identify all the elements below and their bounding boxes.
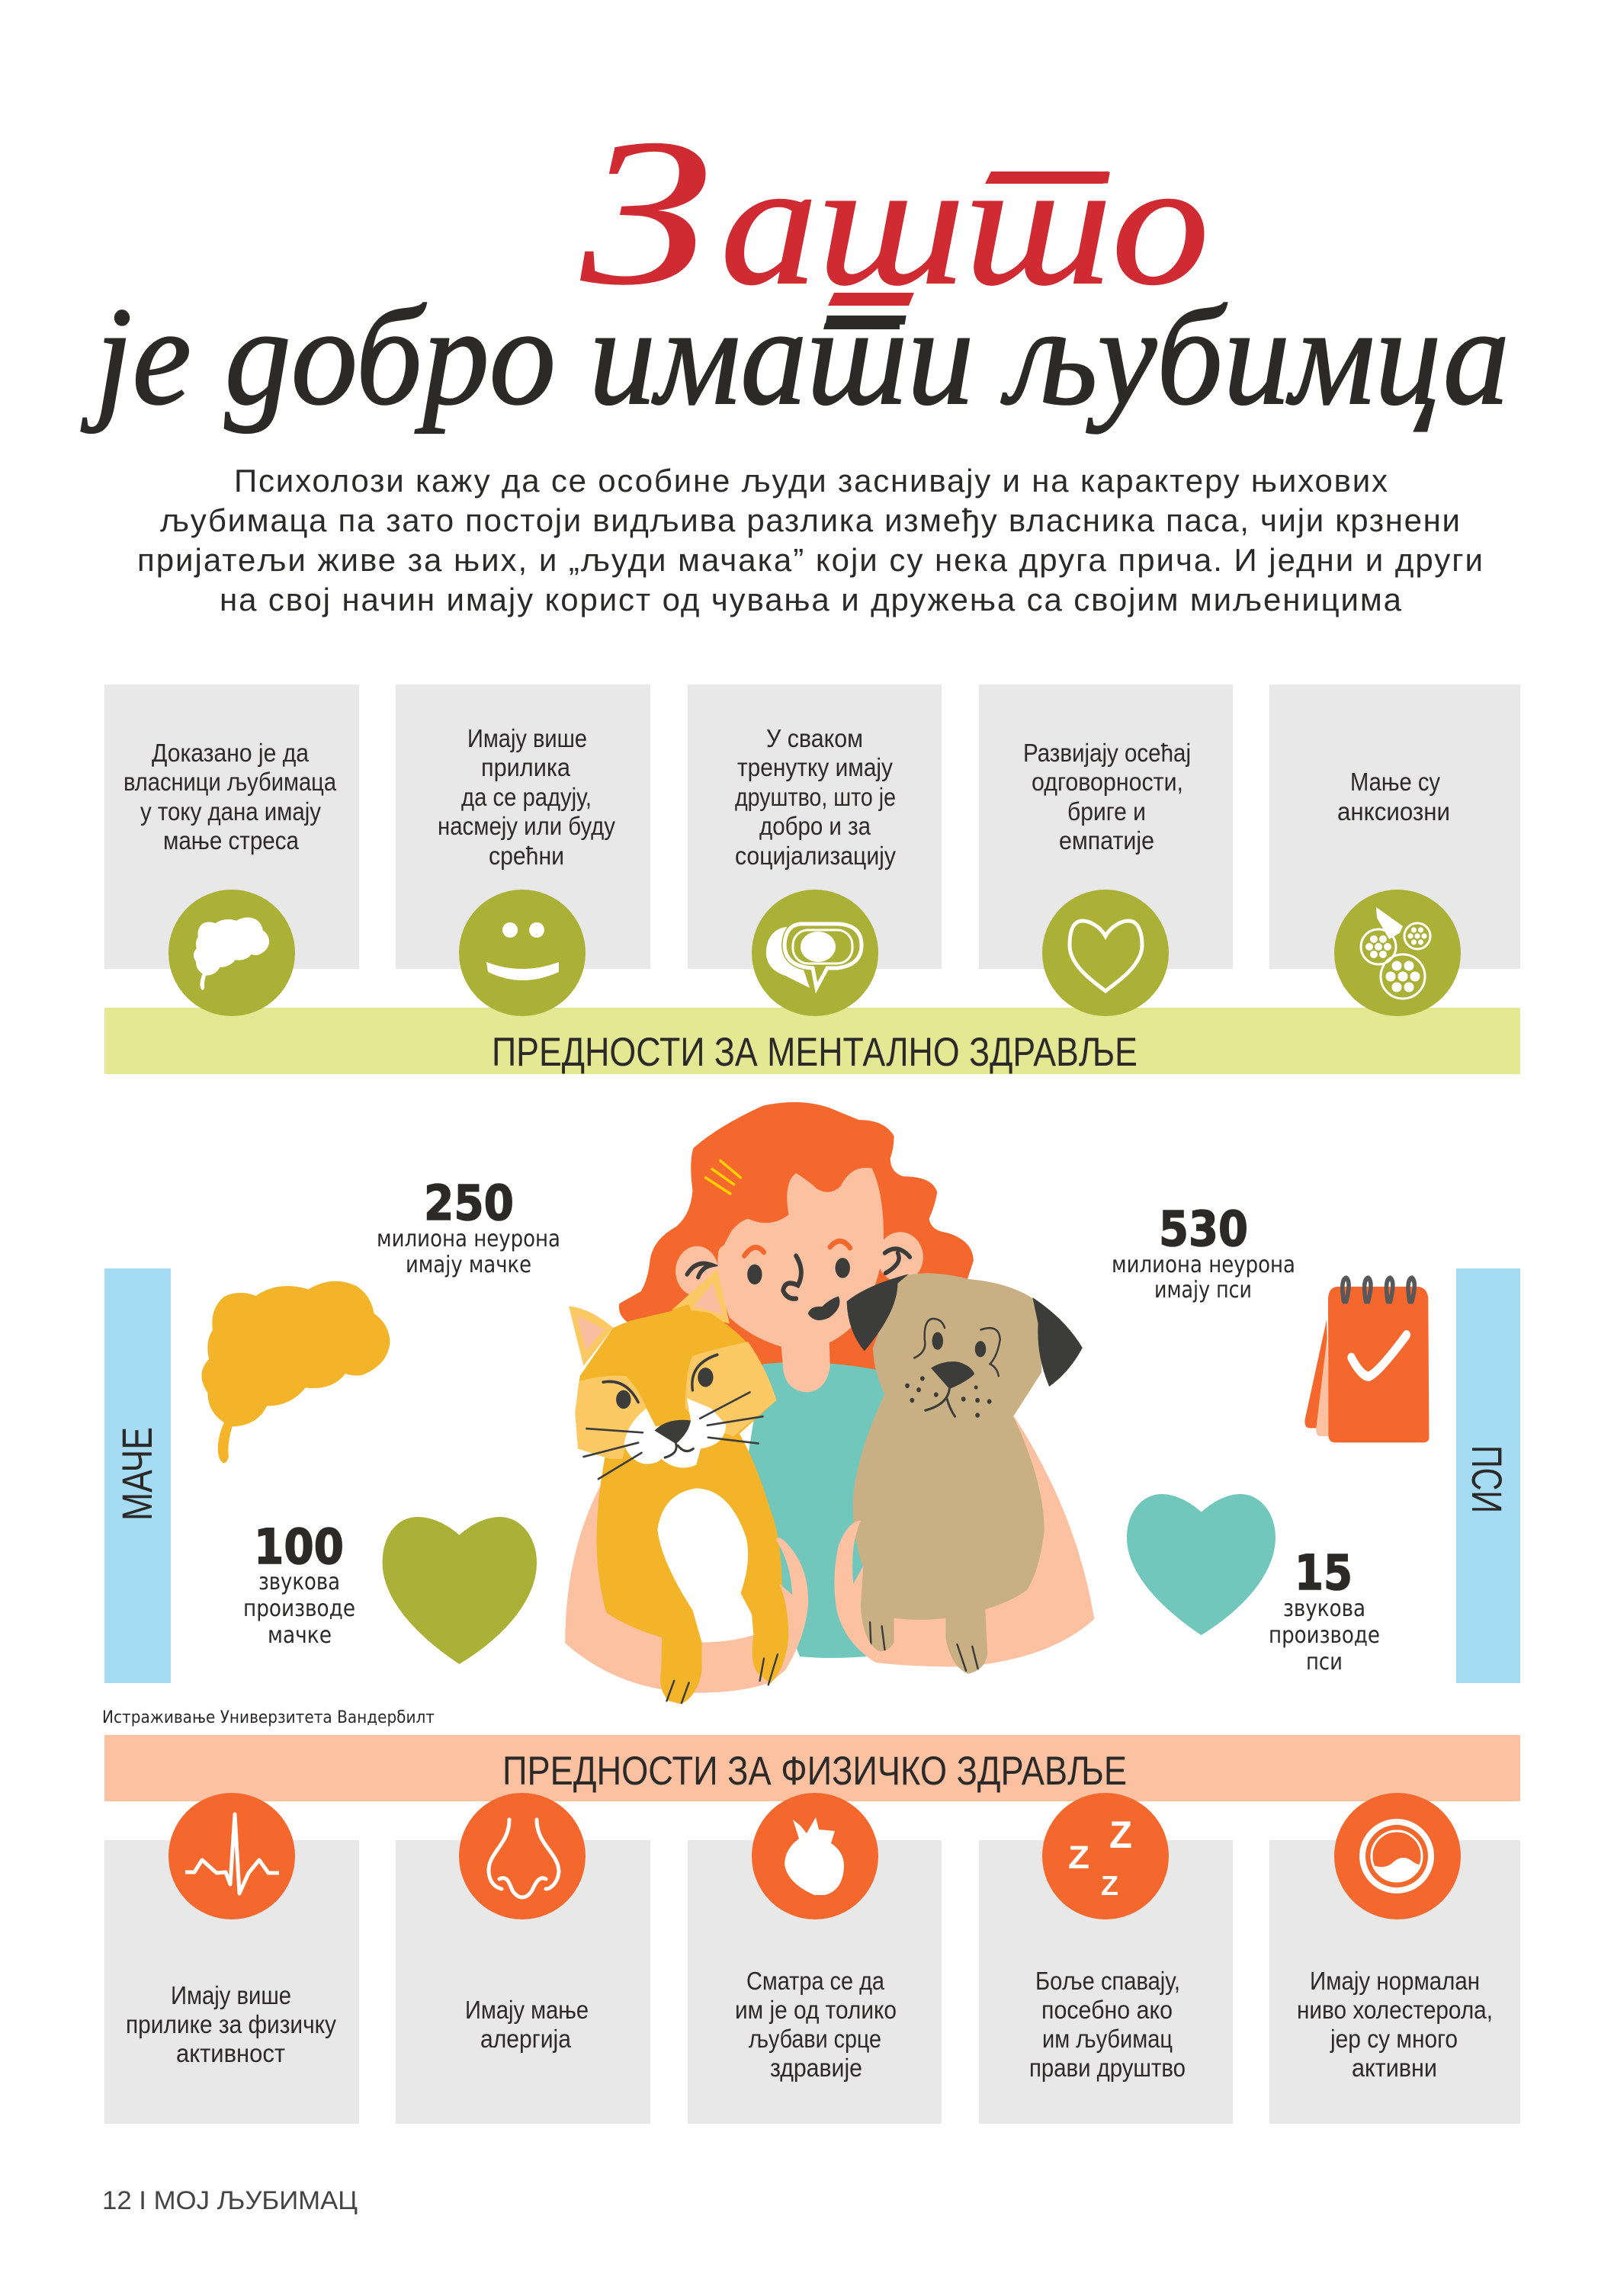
icon: heartbeat [168, 1793, 295, 1919]
dog body [852, 1273, 1044, 1674]
stat: dog neurons: 530 [1159, 1201, 1248, 1257]
side bar: cats [104, 1268, 171, 1683]
intro text block: Психолози кажу да се особине људи заснивају и на карактеру њихових [234, 463, 1388, 499]
panel: more joy [396, 685, 650, 1016]
panel text: прилике за физичку [126, 2010, 336, 2038]
cat claws [666, 1654, 778, 1703]
stat: cat neurons: милиона неурона [377, 1226, 560, 1252]
panel text: тренутку имају [737, 753, 893, 781]
panel: activity [104, 1793, 359, 2124]
title [81, 95, 1510, 434]
band: mental health heading: ПРЕДНОСТИ ЗА МЕНТАЛНО ЗДРАВЉЕ [492, 1030, 1138, 1075]
band: mental health heading [104, 1008, 1520, 1075]
panel text: Развијају осећај [1023, 739, 1191, 767]
panel: heart health [688, 1793, 942, 2124]
panel: company [688, 685, 942, 1016]
icon: brain [168, 890, 295, 1016]
icon: sleep z letters: Z [1101, 1870, 1118, 1901]
title word: red: ашто [720, 126, 1209, 322]
stat: dog sounds: пси [1306, 1649, 1343, 1676]
panel: cholesterol [1269, 1793, 1520, 2124]
panel text: јер су много [1330, 2025, 1458, 2053]
stat: cat neurons: имају мачке [406, 1252, 531, 1278]
panel text: Мање су [1350, 768, 1440, 796]
right hand thumb [834, 1521, 879, 1663]
panel text: прави друштво [1029, 2054, 1186, 2082]
panel: less anxious [1269, 685, 1520, 1016]
icon: sleep z letters: Z [1068, 1839, 1089, 1876]
icon: speech bubbles [752, 890, 878, 1016]
dog face [905, 1319, 1000, 1418]
footer page label: 12 I МОЈ ЉУБИМАЦ [102, 2186, 358, 2215]
intro text block: пријатељи живе за њих, и „људи мачака” који су нека друга прича. И једни и други [137, 542, 1483, 578]
panel text: У сваком [766, 724, 863, 752]
stat: dog sounds: звукова [1283, 1595, 1365, 1622]
panel text [1029, 1967, 1186, 2082]
stat: dog neurons: имају пси [1154, 1277, 1252, 1304]
panel text [438, 724, 615, 870]
stat: cat sounds: 100 [254, 1519, 344, 1575]
panel text: им је од толико [735, 1996, 897, 2024]
intro text block [137, 463, 1483, 617]
icon: artery cross-section [1334, 1793, 1461, 1919]
cat belly [657, 1488, 753, 1643]
panel text: анксиозни [1337, 797, 1450, 826]
stat: cat sounds: производе [243, 1595, 355, 1622]
hair [619, 1102, 974, 1376]
dog ears [847, 1274, 909, 1351]
face and neck [717, 1168, 884, 1392]
stat: dog sounds: 15 [1295, 1545, 1353, 1601]
intro text block: љубимаца па зато постоји видљива разлика између власника паса, чији крзнени [160, 502, 1460, 538]
panel text: посебно ако [1041, 1996, 1173, 2024]
icon: calendar with check [1304, 1278, 1429, 1442]
side bar: cats: МАЧЕ [113, 1427, 161, 1521]
icon: orange brain [201, 1281, 390, 1463]
panel text: Имају нормалан [1310, 1967, 1480, 1995]
panel text: Имају мање [465, 1996, 589, 2024]
title word: red: З [580, 95, 711, 329]
panel: allergies [396, 1793, 650, 2124]
dog claws [870, 1622, 978, 1671]
stat: cat neurons [377, 1175, 560, 1278]
panel text [1297, 1967, 1493, 2082]
dog [847, 1273, 1083, 1674]
band: physical health heading [104, 1735, 1520, 1801]
cat body [596, 1420, 788, 1704]
panel text [735, 724, 896, 870]
icon: heart outline [1042, 890, 1169, 1016]
panel text [1337, 768, 1450, 826]
intro text block: на свој начин имају корист од чувања и дружења са својим миљеницима [220, 582, 1402, 617]
panel text: емпатије [1059, 826, 1154, 855]
stat: dog sounds: производе [1269, 1622, 1380, 1649]
panel text [735, 1967, 897, 2082]
icon: sleep z letters [1042, 1793, 1169, 1919]
panel text: Сматра се да [746, 1967, 885, 1995]
stat: cat neurons: 250 [424, 1175, 514, 1231]
side bar: dogs [1456, 1268, 1520, 1683]
icon: neural fibres [1334, 890, 1461, 1016]
icon: teal heart [1127, 1494, 1276, 1635]
left hand thumb [770, 1538, 808, 1682]
icon: sleep z letters: Z [1109, 1813, 1132, 1856]
panel text: љубави срце [749, 2025, 881, 2053]
stat: dog neurons: милиона неурона [1112, 1252, 1295, 1278]
panel: better sleep [979, 1793, 1233, 2124]
panel text [126, 1981, 336, 2067]
panel text [124, 739, 337, 855]
panel text: одговорности, [1032, 768, 1183, 796]
source note: Истраживање Универзитета Вандербилт [102, 1708, 435, 1727]
facial features [744, 1241, 850, 1320]
panel text: активност [176, 2039, 285, 2067]
stat: dog sounds [1269, 1545, 1380, 1676]
title word: red [580, 95, 1209, 329]
ears [675, 1232, 923, 1296]
panel text: у току дана имају [140, 797, 321, 826]
panel text: прилика [481, 753, 571, 781]
panel text: ниво холестерола, [1297, 1996, 1493, 2024]
panel text: им љубимац [1042, 2025, 1173, 2053]
cat ears [569, 1307, 613, 1366]
shirt [740, 1362, 888, 1658]
panel text: мање стреса [163, 826, 300, 855]
arms [565, 1416, 1094, 1693]
cat head [575, 1310, 776, 1471]
hair clip [705, 1161, 740, 1194]
panel text: добро и за [759, 812, 871, 840]
icon: anatomical heart [752, 1793, 878, 1919]
stat: cat sounds [243, 1519, 355, 1649]
stat: dog neurons [1112, 1201, 1295, 1304]
icon: nose [459, 1793, 586, 1919]
panel text: бриге и [1067, 797, 1146, 826]
icon: olive heart [383, 1517, 537, 1664]
side bar: dogs: ПСИ [1463, 1445, 1511, 1513]
band: physical health heading: ПРЕДНОСТИ ЗА ФИЗИЧКО ЗДРАВЉЕ [502, 1749, 1127, 1794]
panel text: срећни [489, 842, 564, 870]
illustration: woman with cat and dog [565, 1102, 1094, 1704]
panel text: друштво, што је [735, 783, 896, 811]
panel text: социјализацију [735, 842, 896, 870]
hair strand [708, 1231, 731, 1249]
stat: cat sounds: звукова [258, 1569, 340, 1595]
panel: responsibility [979, 685, 1233, 1016]
cat [569, 1269, 788, 1704]
panel: less stress [104, 685, 359, 1016]
panel text: насмеју или буду [438, 812, 615, 840]
panel text: Доказано је да [152, 739, 310, 767]
cat face [583, 1355, 763, 1479]
panel text: здравије [770, 2054, 862, 2082]
panel text: Имају више [171, 1981, 291, 2009]
panel text: Боље спавају, [1035, 1967, 1180, 1995]
panel text: алергија [480, 2025, 572, 2053]
panel text: активни [1352, 2054, 1437, 2082]
panel text: Имају више [467, 724, 587, 752]
stat: cat sounds: мачке [268, 1622, 332, 1649]
title line two: dark: је добро имати љубимца [81, 278, 1510, 434]
panel text: да се радују, [461, 783, 592, 811]
panel text: власници љубимаца [124, 768, 337, 796]
icon: smile [459, 890, 586, 1016]
panel text [465, 1996, 589, 2053]
panel text [1023, 739, 1191, 855]
